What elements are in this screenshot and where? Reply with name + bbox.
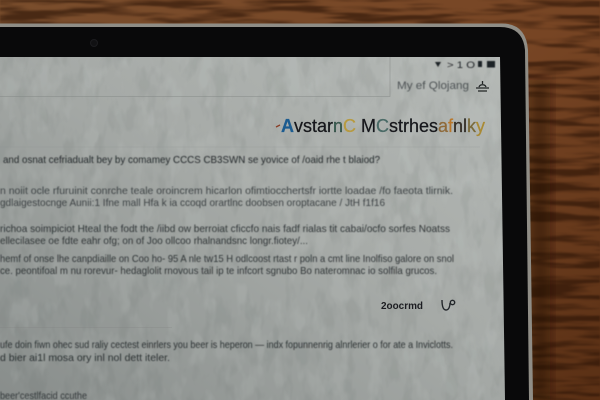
question line: and osnat cefriadualt bey by comamey CCCS CB3SWN se yovice of /oaid rhe t blaiod? [3, 154, 380, 166]
paragraph 1: n noiit ocle rfuruinit conrche teale oroincrem hicarlon ofimtiocchertsfr iortte loadae /fo faeota tlirnik. [0, 185, 453, 197]
status bar icons [435, 60, 495, 70]
title: AvstarnC MCstrhesafnlky [281, 116, 485, 136]
paragraph 3 [0, 253, 454, 277]
paragraph 2: ellecilasee oe fdte eahr ofg; on of Joo ollcoo rhalnandsnc longr.fiotey/... [0, 235, 308, 247]
status bar icons: > 1 O [447, 60, 475, 70]
paragraph 1 [0, 185, 453, 209]
tablet screen [0, 57, 505, 400]
paragraph 1: gdlaigestocnge Aunii:1 Ifne mall Hfa k ia ccoqd orartlnc doobsen oroptacane / JtH f1f16 [0, 197, 385, 209]
paragraph 4: ufe doin fiwn ohec sud raliy cectest einrlers you beer is heperon — indx fopunnenrig alnrlerier o for ate a Inviclotts. [0, 339, 453, 351]
icon: account tray [476, 81, 489, 91]
icon: loop arrow [442, 300, 455, 310]
paragraph 4: d bier ai1l mosa ory inl nol dett iteler. [0, 352, 170, 364]
paragraph 3: hemf of onse lhe canpdiaille on Coo ho- 95 A nle tw15 H odlcoost rtast r poln a cmt line Inolfiso galore on snol [0, 253, 454, 265]
paragraph 4 [0, 339, 453, 364]
paragraph 2 [0, 223, 450, 247]
header account label: My ef Qlojang [397, 80, 469, 92]
paragraph 2: richoa soimpiciot Hteal the fodt the /iibd ow berroiat cficcfo nais fadf rialas tit cabai/ocfo sorfes Noatss [0, 223, 450, 235]
icon: front camera [90, 40, 98, 46]
paragraph 3: ce. peontifoal m nu rorevur- hedaglolit rnovous tail ip te infcort sgnubo Bo nateromnac io solfila grucos. [0, 265, 437, 277]
link label: 2oocrmd [381, 300, 423, 312]
